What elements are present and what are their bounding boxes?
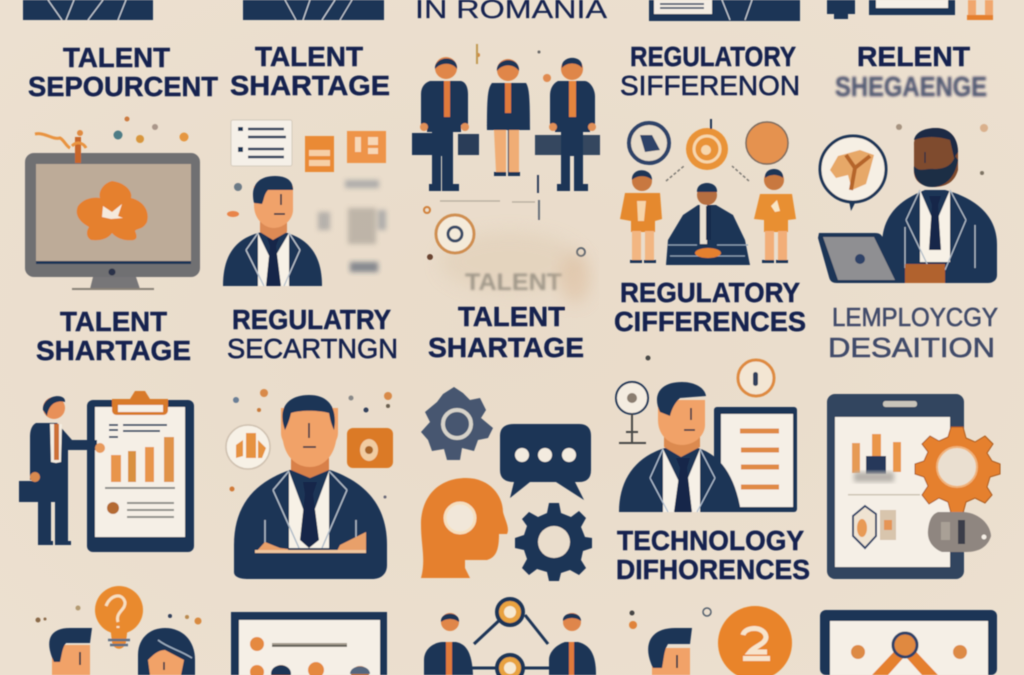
label: talent shartage row 2 center: [428, 301, 584, 363]
label: regulatory cifferences: REGULATORY: [620, 277, 800, 308]
label: regulatory cifferences: [614, 277, 806, 337]
label: regulatry secartngn: SECARTNGN: [227, 333, 398, 364]
label: relent shegaenge: SHEGAENGE: [835, 71, 987, 102]
label: technology diphorences: [616, 525, 810, 585]
label: talent sepourcent: TALENT: [63, 42, 170, 73]
tablet with chart and gear: [827, 394, 1000, 579]
label: regulatory sifferenon: REGULATORY: [630, 41, 796, 72]
bottom: network with two figures: [424, 599, 596, 675]
label: lemployagy desaition: LEMPLOYCGY: [832, 302, 998, 332]
label: relent shegaenge: [835, 41, 987, 102]
blurred tan wash: [560, 253, 590, 303]
label: regulatory cifferences: CIFFERENCES: [614, 306, 806, 337]
label: regulatry secartngn: REGULATRY: [232, 304, 391, 335]
regulatory group icon: [620, 119, 796, 265]
three business figures with briefcases: [412, 44, 600, 191]
blurred ghost icons beside bust: [318, 180, 386, 272]
top row: cropped business busts and frames: [23, 0, 993, 21]
label: lemployagy desaition: DESAITION: [828, 332, 995, 363]
label: lemployagy desaition: [828, 302, 998, 363]
label: talent shartage: [230, 41, 390, 101]
bottom: framed card with triangle figure: [820, 610, 997, 675]
label: technology diphorences: DIFHORENCES: [616, 554, 810, 585]
big bust with arms crossed: [226, 389, 393, 579]
label: technology diphorences: TECHNOLOGY: [617, 525, 804, 556]
technology person with checklist board: [616, 356, 797, 512]
label: regulatory sifferenon: SIFFERENON: [620, 70, 800, 101]
label: relent shegaenge: RELENT: [857, 41, 970, 72]
label: talent shartage row 2 left: TALENT: [60, 306, 167, 337]
bottom: man with numbered orange badge: [629, 606, 792, 675]
label: talent shartage row 2 center: TALENT: [458, 301, 565, 332]
label: regulatry secartngn: [227, 304, 398, 364]
gear, head and speech bubble icon: [421, 387, 592, 581]
bottom: framed card with people: [231, 612, 387, 675]
man with laptop and speech bubble: [818, 124, 997, 283]
faded center icons with ghost label: [424, 175, 585, 296]
label: talent sepourcent: SEPOURCENT: [28, 71, 218, 102]
label: talent shartage: TALENT: [255, 41, 363, 72]
monitor icon: [25, 116, 200, 290]
faded center icons with ghost label: TALENT: [465, 269, 562, 296]
label: talent shartage row 2 left: [36, 306, 191, 366]
presenter with clipboard chart: [19, 391, 194, 552]
label: talent shartage row 2 left: SHARTAGE: [36, 335, 191, 366]
bust with documents: [223, 120, 386, 286]
label: talent sepourcent: [28, 42, 218, 102]
label: regulatory sifferenon: [620, 41, 800, 101]
label: talent shartage row 2 center: SHARTAGE: [428, 332, 584, 363]
bottom: lightbulb with man and woman: [36, 586, 202, 675]
label: talent shartage: SHARTAGE: [230, 70, 390, 101]
